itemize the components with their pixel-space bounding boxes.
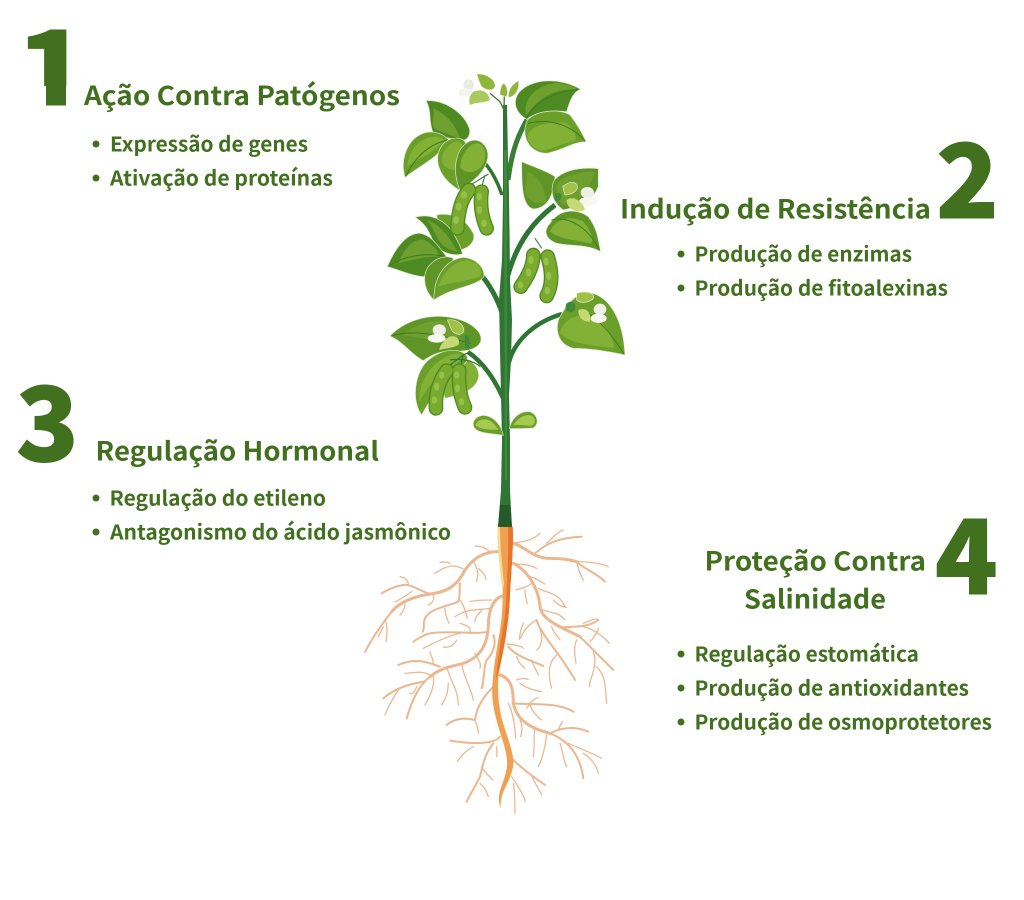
leaf: middle left top xyxy=(415,214,474,255)
heading 3: Regulação Hormonal xyxy=(96,432,379,468)
flower: top xyxy=(459,74,519,110)
leaf: upper left xyxy=(403,132,448,177)
panel: 1 Ação Contra Patógenos xyxy=(28,30,399,192)
bullet list 2: Produção de enzimas xyxy=(694,238,912,268)
flower: right xyxy=(554,182,597,211)
flower: lower left xyxy=(428,320,469,350)
small leaf left xyxy=(473,415,503,435)
bullet list 4 xyxy=(678,638,992,736)
bullet list 3 xyxy=(92,482,451,546)
heading 4: Proteção Contra xyxy=(704,542,926,578)
panel: 2 Indução de Resistência xyxy=(620,99,999,302)
leaf: right middle dark xyxy=(522,162,555,209)
leaf: lower right xyxy=(557,293,625,355)
leaf: lower left dark xyxy=(390,316,481,361)
leaf: upper left dark xyxy=(426,101,470,140)
bullet list 4: Produção de antioxidantes xyxy=(694,672,969,702)
panel: plant illustration xyxy=(365,74,625,813)
pods xyxy=(453,174,551,296)
flower: lower right xyxy=(566,292,607,323)
branches xyxy=(468,118,562,398)
number 2: 2 xyxy=(936,99,999,248)
main stem xyxy=(498,105,512,527)
bullet list 2: Produção de fitoalexinas xyxy=(694,272,948,302)
leaf: upper center right xyxy=(456,140,488,191)
bullet list 1: Expressão de genes xyxy=(110,128,308,158)
leaf: upper center xyxy=(438,138,468,191)
panel: 4 Proteção Contra Salinidade xyxy=(678,475,998,736)
heading 4: Salinidade xyxy=(744,580,886,616)
bullet list 3: Antagonismo do ácido jasmônico xyxy=(109,516,451,546)
heading 2: Indução de Resistência xyxy=(620,190,931,226)
plant stem and branches xyxy=(468,105,562,527)
leaf: top right lower xyxy=(525,111,586,153)
bullet list 2 xyxy=(678,238,948,302)
bullet list 4: Produção de osmoprotetores xyxy=(694,706,992,736)
number 4: 4 xyxy=(935,475,998,624)
number 3: 3 xyxy=(16,342,79,491)
bullet list 4: Regulação estomática xyxy=(694,638,919,668)
leaf: top right upper xyxy=(515,81,581,119)
plant roots xyxy=(365,527,613,813)
lower plant leaves, pods and flowers xyxy=(390,292,625,435)
leaf: middle left lower xyxy=(425,257,484,300)
panel: 3 Regulação Hormonal xyxy=(16,342,451,546)
upper plant leaves, pods and flowers xyxy=(387,74,601,300)
bullet list 1: Ativação de proteínas xyxy=(109,162,333,192)
heading 4 xyxy=(704,542,926,616)
leaf: right lower xyxy=(546,211,601,252)
heading 1: Ação Contra Patógenos xyxy=(83,76,400,113)
pods xyxy=(432,352,480,408)
leaf: middle left xyxy=(387,233,447,277)
leaf: lower left light xyxy=(415,350,479,415)
small leaf right xyxy=(509,412,537,429)
bullet list 1 xyxy=(92,128,333,192)
leaf: right upper xyxy=(552,168,598,210)
bullet list 3: Regulação do etileno xyxy=(110,482,326,512)
